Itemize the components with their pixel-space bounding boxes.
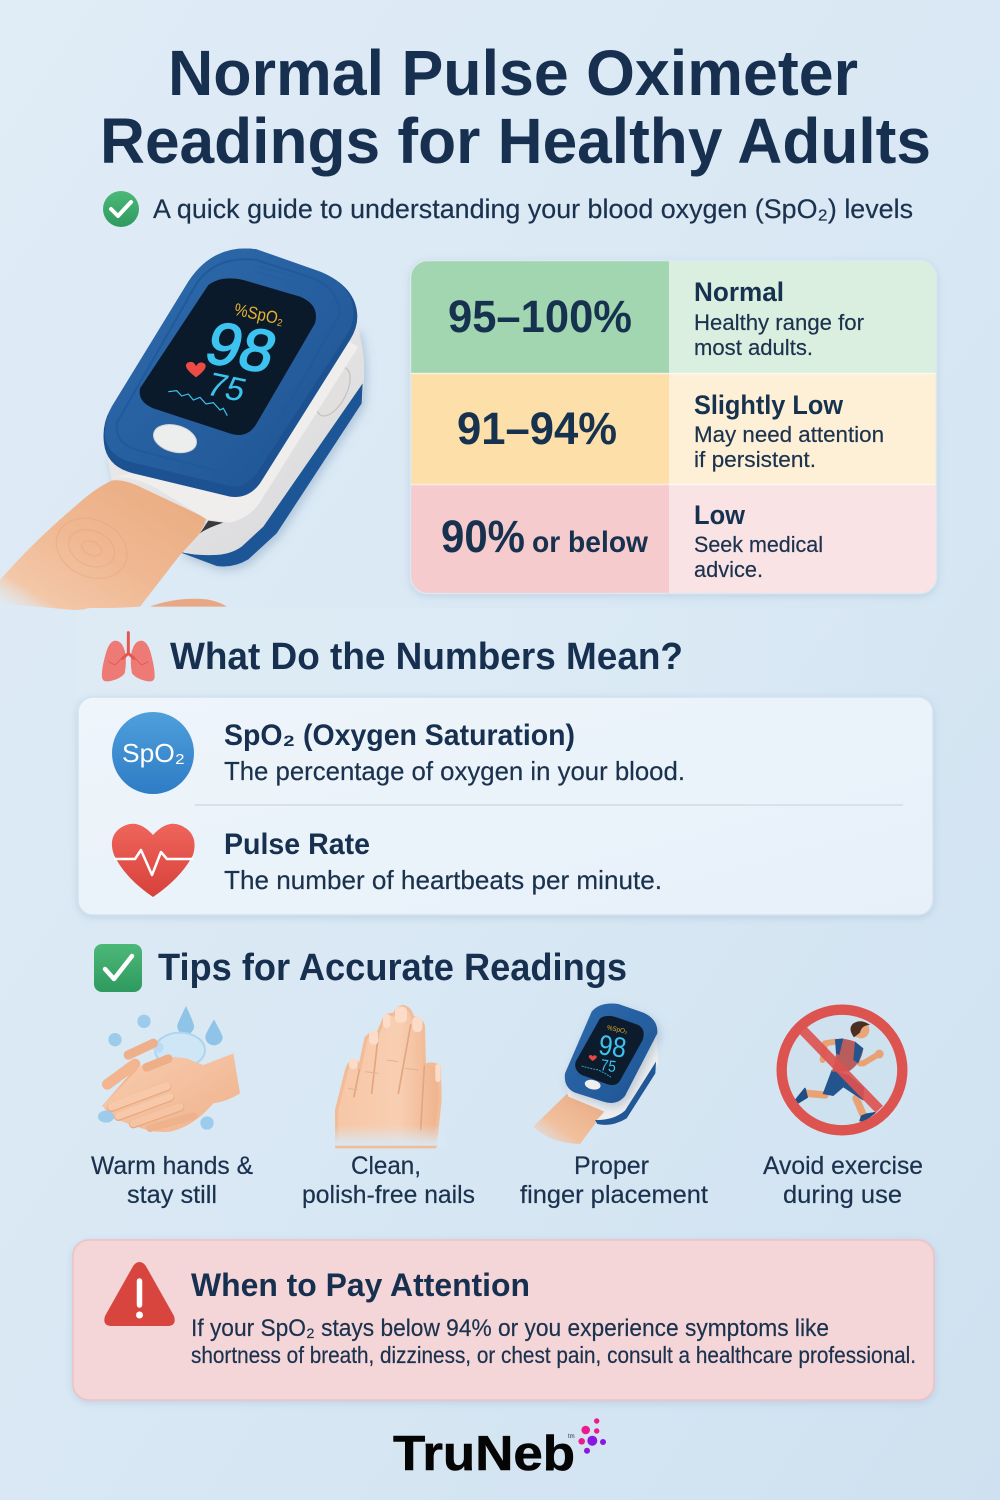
screen readings: 75: [202, 367, 251, 409]
small screen readings: 75: [599, 1057, 617, 1076]
tip labels: polish-free nails: [302, 1181, 475, 1209]
row: slightly low: [457, 390, 884, 472]
title: Normal Pulse Oximeter: [168, 37, 858, 109]
heading: tips: Tips for Accurate Readings: [158, 947, 627, 989]
row: low: 90%: [441, 511, 525, 562]
text: SpO2 definition: [224, 719, 685, 786]
alert text: When to Pay Attention: [191, 1267, 530, 1303]
panel: when to pay attention: [73, 1240, 934, 1400]
text: SpO2 definition: The percentage of oxygen in your blood.: [224, 756, 685, 786]
screen readings: [168, 299, 286, 416]
icon: green check box: [94, 944, 142, 992]
screen readings: %SpO₂: [232, 299, 286, 329]
small screen readings: %SpO₂: [606, 1024, 628, 1036]
row: normal: 95–100%: [448, 291, 632, 342]
tip labels: finger placement: [520, 1181, 708, 1209]
screen readings: 98: [198, 309, 285, 385]
icon: heart with pulse line: [112, 824, 195, 897]
heading: what do the numbers mean: What Do the Numbers Mean?: [170, 636, 683, 678]
text: pulse rate definition: [224, 828, 662, 895]
row: slightly low: 91–94%: [457, 403, 617, 454]
row: slightly low: if persistent.: [694, 447, 816, 472]
icon: lungs: [102, 633, 155, 681]
alert text: If your SpO₂ stays below 94% or you experience symptoms like: [191, 1315, 829, 1342]
tip labels: Clean,: [351, 1152, 421, 1180]
text: pulse rate definition: Pulse Rate: [224, 828, 370, 861]
tip labels: during use: [783, 1181, 902, 1209]
tip labels: stay still: [127, 1181, 217, 1209]
icon: no exercise sign: [782, 1010, 902, 1130]
icon: small pulse oximeter: [533, 1004, 658, 1144]
small screen readings: 98: [597, 1029, 628, 1065]
alert text: [191, 1267, 916, 1368]
runner: [793, 1021, 884, 1122]
icon: washing hands: [98, 1006, 240, 1132]
row: low: Seek medical: [694, 532, 823, 557]
results panel background: [75, 608, 945, 697]
row: low: advice.: [694, 557, 763, 582]
icon: hand with clean nails: [330, 1007, 447, 1147]
text: pulse rate definition: The number of heartbeats per minute.: [224, 865, 662, 895]
row: low: Low: [694, 500, 746, 530]
row: slightly low: Slightly Low: [694, 390, 844, 420]
title: Readings for Healthy Adults: [100, 105, 931, 177]
row: low: or below: [532, 526, 649, 559]
logo: TruNeb: TruNeb: [393, 1427, 575, 1481]
logo: TruNeb: tm: [568, 1434, 575, 1440]
device body: [107, 327, 364, 566]
screen: [140, 278, 316, 435]
row: slightly low: May need attention: [694, 422, 884, 447]
finger: [0, 480, 227, 610]
row: low: [441, 500, 823, 582]
icon: SpO2 badge: [112, 712, 194, 794]
tip labels: Avoid exercise: [763, 1152, 923, 1180]
row: normal: Normal: [694, 277, 784, 307]
readings table: [410, 260, 937, 594]
icon: SpO2 badge: SpO₂: [122, 738, 185, 768]
alert text: shortness of breath, dizziness, or chest pain, consult a healthcare professional.: [191, 1342, 916, 1368]
icon: warning triangle: [104, 1262, 175, 1326]
title: [100, 37, 931, 177]
row: normal: Healthy range for: [694, 310, 864, 335]
power button: [150, 420, 200, 457]
panel: definitions: [78, 697, 933, 915]
tip labels: [91, 1152, 923, 1209]
row: normal: most adults.: [694, 335, 813, 360]
logo: TruNeb: [393, 1418, 606, 1481]
subtitle with check icon: A quick guide to understanding your blood oxygen (SpO₂) levels: [153, 194, 913, 224]
text: SpO2 definition: SpO₂ (Oxygen Saturation): [224, 719, 575, 752]
tip labels: Proper: [574, 1152, 649, 1180]
pulse oximeter illustration: [0, 249, 364, 610]
tip labels: Warm hands &: [91, 1152, 253, 1180]
blue lid: [103, 249, 357, 497]
small screen readings: [582, 1024, 628, 1077]
row: normal: [448, 277, 864, 360]
